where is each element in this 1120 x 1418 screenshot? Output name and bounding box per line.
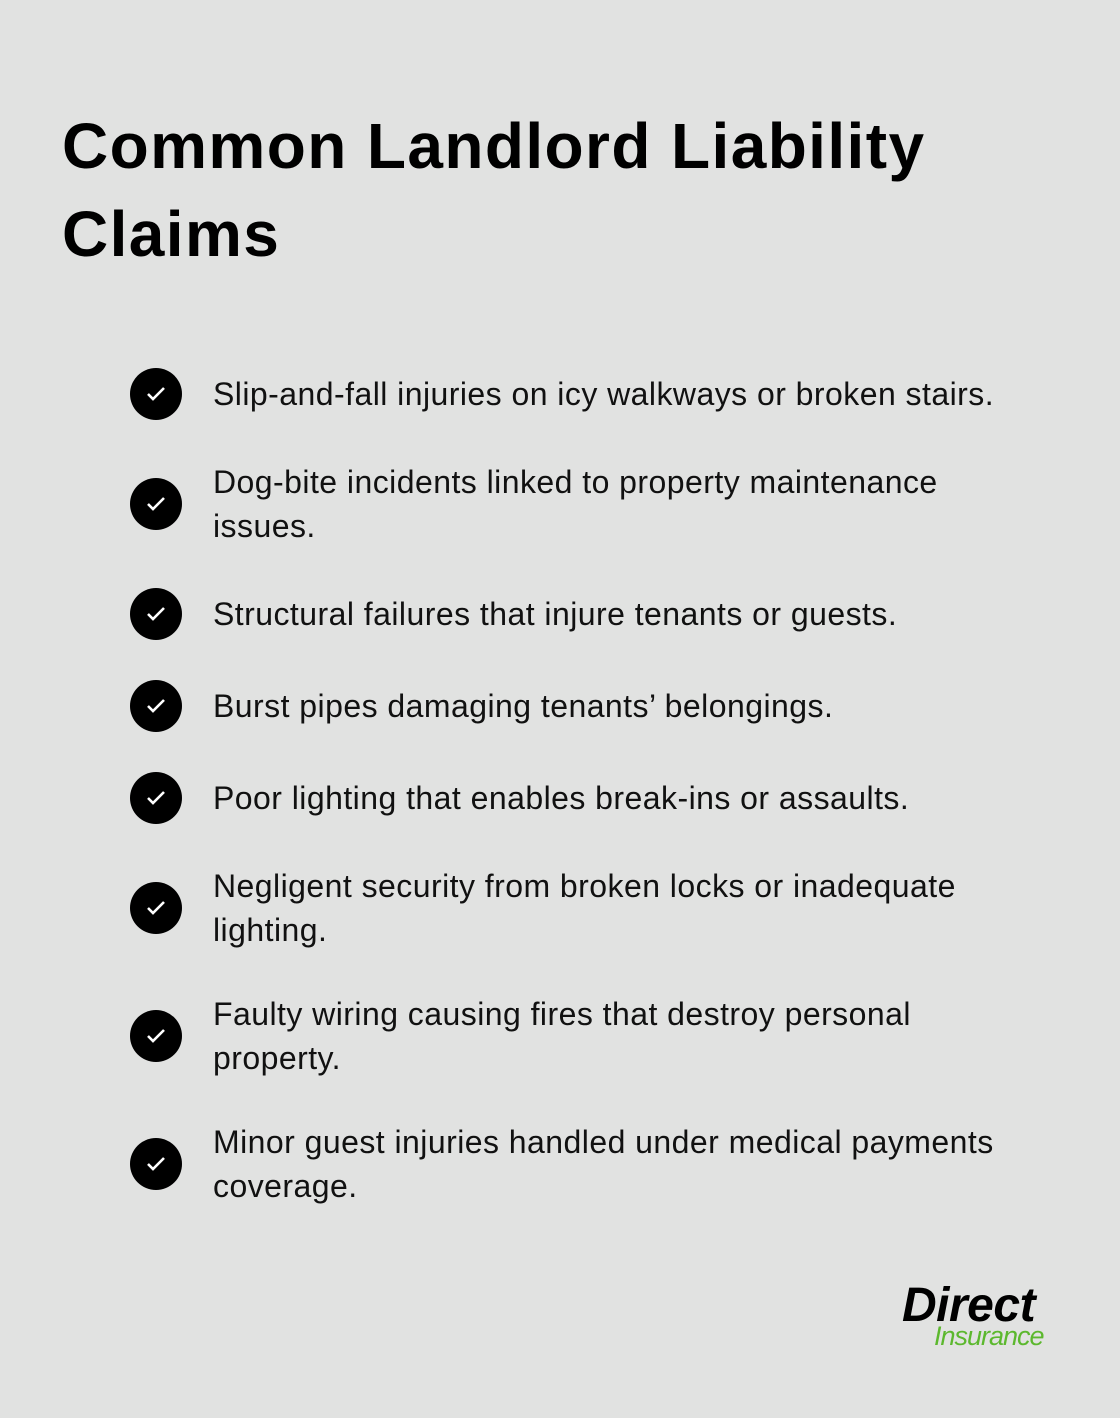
item 5 (130, 772, 909, 824)
item 8 (130, 1124, 994, 1204)
item 6 (130, 868, 956, 948)
item 2: issues. (213, 508, 316, 544)
title (62, 110, 925, 270)
item 7: Faulty wiring causing fires that destroy personal (213, 996, 911, 1032)
item 7: property. (213, 1040, 341, 1076)
item 4 (130, 680, 833, 732)
item 2 (130, 464, 938, 544)
item 3 (130, 588, 897, 640)
item 6: Negligent security from broken locks or inadequate (213, 868, 956, 904)
title: Claims (62, 198, 280, 270)
item 3: Structural failures that injure tenants or guests. (213, 596, 897, 632)
item 8: coverage. (213, 1168, 358, 1204)
item 1: Slip-and-fall injuries on icy walkways or broken stairs. (213, 376, 994, 412)
logo: Direct (902, 1279, 1035, 1332)
item 6: lighting. (213, 912, 327, 948)
item 1 (130, 368, 994, 420)
item 7 (130, 996, 911, 1076)
item 4: Burst pipes damaging tenants’ belongings. (213, 688, 833, 724)
logo (902, 1279, 1044, 1351)
item 8: Minor guest injuries handled under medical payments (213, 1124, 994, 1160)
item 2: Dog-bite incidents linked to property maintenance (213, 464, 938, 500)
item 5: Poor lighting that enables break-ins or assaults. (213, 780, 909, 816)
logo: Insurance (934, 1321, 1044, 1351)
title: Common Landlord Liability (62, 110, 925, 182)
